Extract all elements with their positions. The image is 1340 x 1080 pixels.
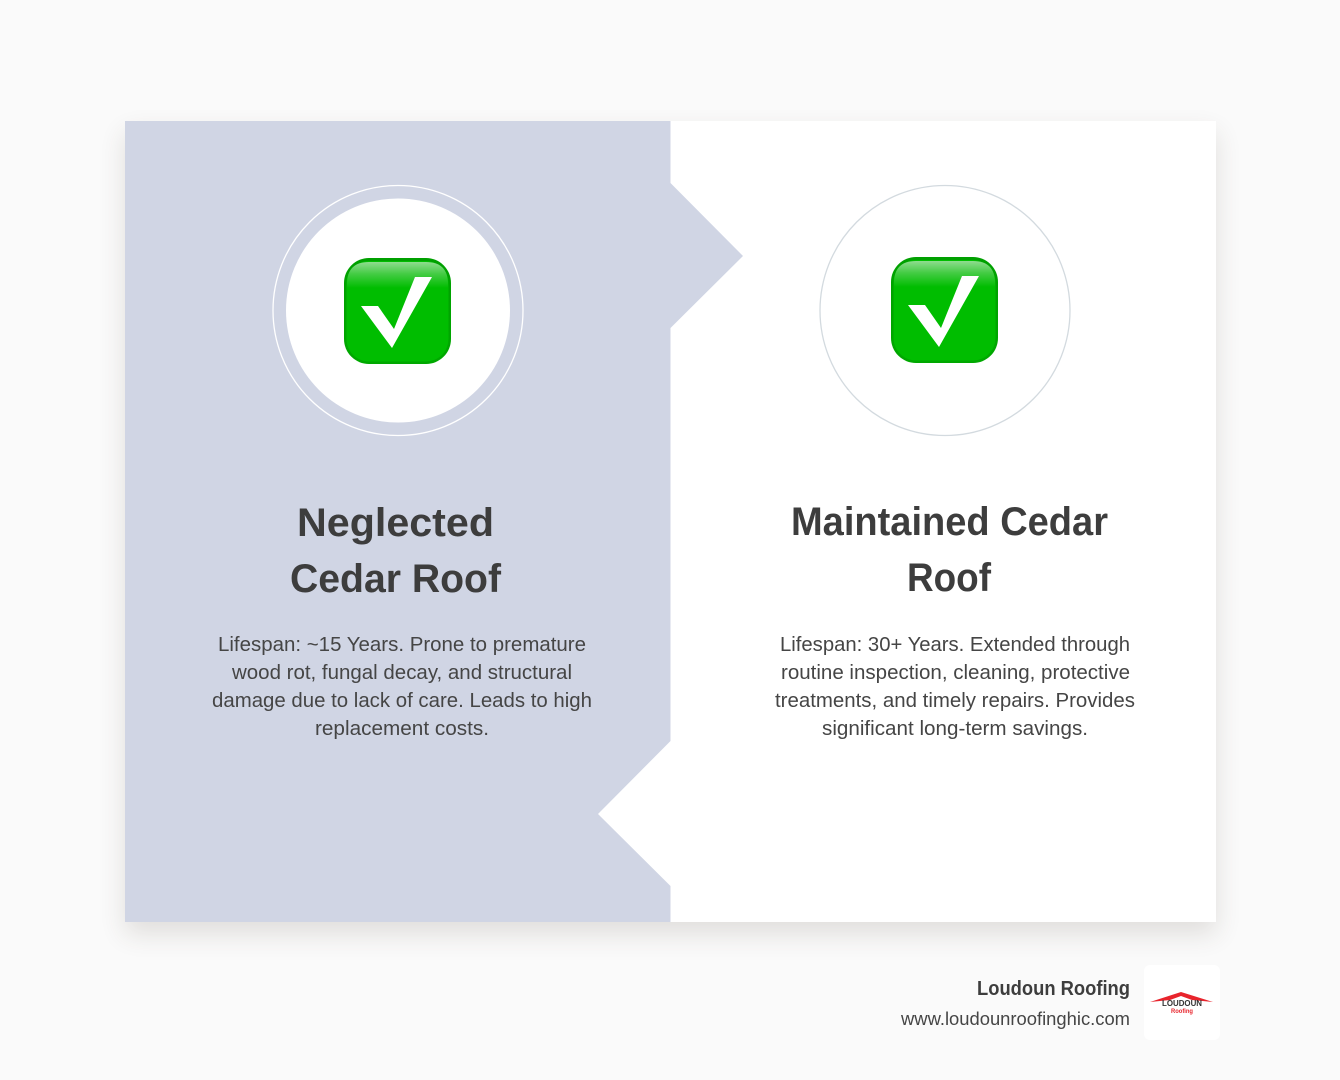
text block: maintained description [775, 634, 1135, 740]
icon: neglected check mark [344, 258, 451, 364]
panel: neglected roof background with arrow and notch [125, 121, 743, 922]
text block: maintained description: treatments, and timely repairs. Provides [775, 690, 1135, 712]
heading: neglected cedar roof: Neglected [297, 501, 494, 545]
text block: neglected description [212, 634, 592, 740]
icon: maintained outer ring [820, 186, 1070, 436]
website: www.loudounroofinghic.com [900, 1009, 1130, 1029]
heading: maintained cedar roof [791, 500, 1108, 600]
icon: neglected inner disc [286, 198, 510, 422]
text block: neglected description: damage due to lack of care. Leads to high [212, 690, 592, 712]
footer: brand credit [900, 965, 1220, 1040]
icon: neglected outer ring [273, 186, 523, 436]
text block: maintained description: routine inspection, cleaning, protective [781, 662, 1130, 684]
panel: maintained cedar roof content [775, 186, 1135, 740]
icon: maintained check mark [891, 257, 998, 363]
heading: maintained cedar roof: Roof [907, 556, 992, 600]
panel: neglected cedar roof content [212, 186, 592, 740]
text block: neglected description: Lifespan: ~15 Years. Prone to premature [218, 634, 586, 656]
text block: neglected description: replacement costs. [315, 718, 489, 740]
heading: maintained cedar roof: Maintained Cedar [791, 500, 1108, 544]
heading: neglected cedar roof: Cedar Roof [290, 557, 502, 601]
icon: logo roof [1150, 992, 1213, 1002]
logo subtitle: Roofing [1171, 1009, 1193, 1015]
text block: maintained description: Lifespan: 30+ Years. Extended through [780, 634, 1130, 656]
heading: neglected cedar roof [290, 501, 502, 601]
logo tile [1144, 965, 1220, 1040]
brand name: Loudoun Roofing [977, 978, 1130, 1000]
text block: neglected description: wood rot, fungal decay, and structural [231, 662, 572, 684]
logo wordmark: LOUDOUN [1162, 999, 1202, 1008]
card background [125, 121, 1216, 922]
text block: maintained description: significant long-term savings. [822, 718, 1088, 740]
